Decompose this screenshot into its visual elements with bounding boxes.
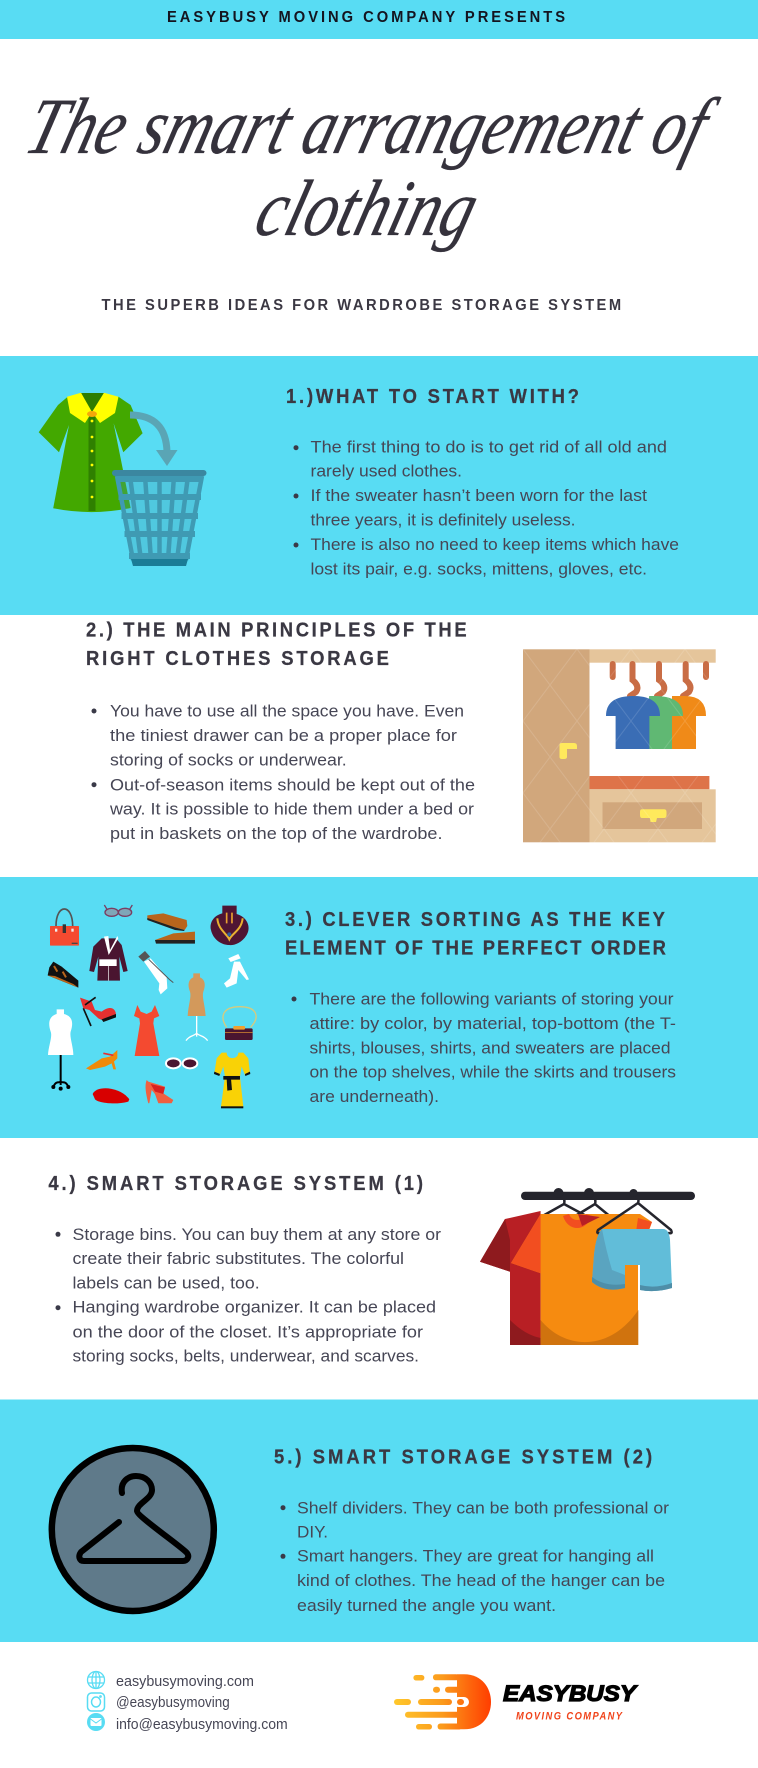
bullet list: storing socks, belts, underwear, and scarves.: [72, 1347, 419, 1366]
icon: globe: [88, 1672, 104, 1688]
icon: red dress: [134, 1005, 159, 1056]
icon: sunglasses: [166, 1058, 197, 1068]
bullet list: Shelf dividers. They can be both professional or: [297, 1498, 669, 1517]
bullet list: way. It is possible to hide them under a bed or: [109, 800, 474, 819]
icon: orange heel: [86, 1050, 117, 1070]
icon: hanger in circle: [52, 1448, 214, 1611]
icon: glasses: [104, 905, 132, 916]
bullet list: on the door of the closet. It’s appropriate for: [72, 1322, 423, 1341]
heading: [285, 909, 666, 960]
bullet list: labels can be used, too.: [72, 1273, 260, 1292]
tagline: MOVING COMPANY: [516, 1711, 623, 1723]
heading: RIGHT CLOTHES STORAGE: [86, 648, 389, 670]
bullet list: DIY.: [297, 1523, 328, 1542]
icon: red bag: [50, 909, 79, 946]
bullet list: shirts, blouses, shirts, and sweaters are placed: [310, 1038, 670, 1057]
bullet list: are underneath).: [310, 1087, 439, 1106]
bullet list: Hanging wardrobe organizer. It can be placed: [72, 1298, 436, 1317]
bullet list: If the sweater hasn’t been worn for the last: [310, 486, 647, 505]
heading: 2.) THE MAIN PRINCIPLES OF THE: [86, 620, 467, 642]
icon: tan mannequin: [186, 973, 208, 1041]
icon: white heels: [224, 954, 249, 988]
wordmark: EASYBUSY: [503, 1681, 639, 1706]
bullet list: three years, it is definitely useless.: [310, 510, 576, 529]
heading: 1.)WHAT TO START WITH?: [286, 386, 579, 408]
icon: coat: [89, 936, 128, 981]
icon: brown shoes: [147, 913, 195, 944]
icon: necklace bust: [211, 906, 249, 945]
footer contacts: [87, 1672, 288, 1733]
icon: speeding D mark: [394, 1674, 491, 1730]
icon: yellow dress: [214, 1053, 250, 1108]
title: clothing: [247, 163, 489, 253]
bullet list: create their fabric substitutes. The colorful: [72, 1249, 404, 1268]
icon: green shirt: [39, 393, 143, 512]
heading: [86, 620, 467, 670]
bullet list: [92, 702, 475, 843]
panel: clever sorting: [0, 877, 758, 1138]
panel: main principles: [86, 620, 716, 843]
arrow into basket: [130, 415, 178, 466]
title: [17, 81, 727, 253]
bullet list: [294, 437, 679, 578]
bullet list: The first thing to do is to get rid of all old and: [310, 437, 667, 456]
bullet list: put in baskets on the top of the wardrobe.: [110, 824, 442, 843]
bullet list: [280, 1498, 669, 1615]
bullet list: Smart hangers. They are great for hanging all: [297, 1547, 654, 1566]
heading: ELEMENT OF THE PERFECT ORDER: [285, 938, 666, 960]
icon: black shoe: [48, 962, 78, 988]
bullet list: You have to use all the space you have. Even: [110, 702, 464, 721]
bullet list: Out-of-season items should be kept out of the: [110, 775, 475, 794]
bullet list: storing of socks or underwear.: [110, 750, 347, 769]
icon: waste basket: [112, 470, 206, 566]
icon: wardrobe: [523, 649, 716, 842]
icon: clothes on hanging rail: [480, 1188, 695, 1345]
subtitle: THE SUPERB IDEAS FOR WARDROBE STORAGE SYSTEM: [102, 297, 621, 314]
bullet list: easily turned the angle you want.: [297, 1596, 556, 1615]
icon: red beret: [93, 1088, 129, 1103]
icon: mail: [87, 1713, 105, 1731]
icon: red high heel: [146, 1080, 173, 1103]
bullet list: kind of clothes. The head of the hanger can be: [297, 1571, 665, 1590]
bullet list: There are the following variants of storing your: [310, 989, 674, 1008]
heading: 3.) CLEVER SORTING AS THE KEY: [285, 909, 665, 931]
panel: smart storage system 1: [48, 1173, 695, 1366]
top banner: EASYBUSY MOVING COMPANY PRESENTS: [167, 9, 565, 26]
bullet list: on the top shelves, while the skirts and trousers: [310, 1063, 676, 1082]
bullet list: rarely used clothes.: [310, 462, 462, 481]
website: easybusymoving.com: [116, 1673, 254, 1690]
icon: white boot: [138, 951, 173, 994]
heading: 4.) SMART STORAGE SYSTEM (1): [48, 1173, 423, 1195]
top banner: [0, 0, 758, 39]
panel: what to start with: [0, 356, 758, 615]
icon: handbag: [223, 1007, 256, 1040]
icon: white mannequin: [48, 1009, 73, 1091]
panel: smart storage system 2: [0, 1400, 758, 1642]
bullet list: attire: by color, by material, top-bottom (the T-: [310, 1014, 676, 1033]
bullet list: Storage bins. You can buy them at any store or: [72, 1225, 441, 1244]
icon: red heel: [80, 997, 116, 1026]
icon: collection of fashion items: [48, 905, 256, 1108]
bullet list: the tiniest drawer can be a proper place for: [110, 726, 457, 745]
company logo: [394, 1674, 639, 1730]
heading: 5.) SMART STORAGE SYSTEM (2): [274, 1447, 652, 1469]
bullet list: lost its pair, e.g. socks, mittens, gloves, etc.: [310, 559, 647, 578]
bullet list: There is also no need to keep items which have: [310, 535, 679, 554]
bullet list: [56, 1225, 441, 1366]
icon: instagram: [88, 1693, 104, 1711]
instagram handle: @easybusymoving: [116, 1694, 230, 1711]
bullet list: [292, 989, 676, 1106]
email: info@easybusymoving.com: [116, 1716, 288, 1733]
